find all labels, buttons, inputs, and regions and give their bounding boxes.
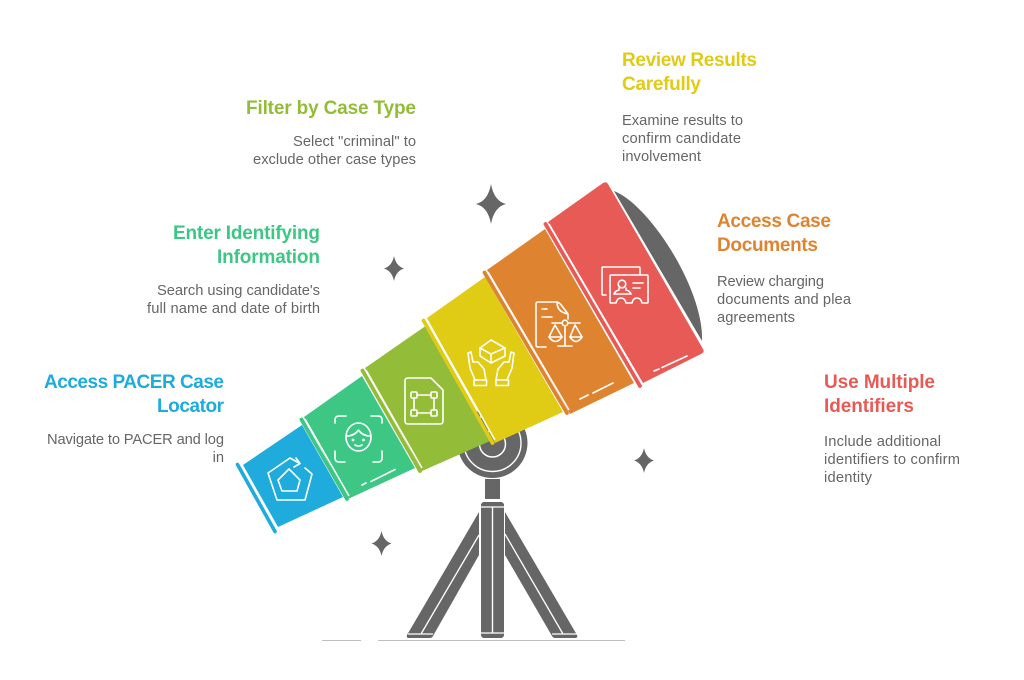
text block: Use Multiple Identifiers: Identifiers	[824, 396, 914, 417]
text block: Enter Identifying Information	[147, 223, 320, 317]
star: right	[634, 448, 654, 473]
text block: Access PACER Case Locator: in	[213, 450, 224, 466]
text block: Access PACER Case Locator	[44, 372, 225, 466]
text block: Use Multiple Identifiers: Include additional	[824, 434, 941, 450]
text block: Access PACER Case Locator: Access PACER Case	[44, 372, 224, 393]
text block: Use Multiple Identifiers: Use Multiple	[824, 372, 935, 393]
icon: pentagon with rotation arrow	[268, 458, 312, 500]
text block: Access Case Documents: Access Case	[717, 211, 831, 232]
text block: Access Case Documents	[717, 211, 852, 326]
text block: Access Case Documents: Documents	[717, 235, 818, 256]
icon: ID cards	[602, 267, 648, 303]
text block: Review Results Carefully: confirm candidate	[622, 131, 741, 147]
text block: Access PACER Case Locator: Navigate to PACER and log	[47, 432, 224, 448]
segment 6: red	[546, 182, 704, 386]
icon: hands holding a box	[468, 340, 514, 386]
text block: Review Results Carefully: Review Results	[622, 50, 757, 71]
text block: Access PACER Case Locator: Locator	[157, 396, 225, 417]
text block: Review Results Carefully: Carefully	[622, 74, 701, 95]
text block: Access Case Documents: Review charging	[717, 274, 824, 290]
star: top	[476, 184, 506, 224]
text block: Enter Identifying Information: full name and date of birth	[147, 301, 320, 317]
text block: Enter Identifying Information: Information	[217, 247, 320, 268]
segment 3: olive	[362, 325, 490, 471]
text block: Filter by Case Type: Filter by Case Type	[246, 98, 416, 119]
text block: Enter Identifying Information: Enter Identifying	[173, 223, 320, 244]
text block: Use Multiple Identifiers: identifiers to confirm	[824, 452, 960, 468]
tripod stand	[407, 408, 577, 638]
highlight dashes	[654, 356, 687, 371]
star: left	[384, 256, 404, 281]
segment 4: yellow	[424, 277, 563, 443]
icon: document with scales	[536, 302, 582, 347]
text block: Use Multiple Identifiers: identity	[824, 470, 873, 486]
ground line	[322, 640, 625, 642]
text block: Enter Identifying Information: Search using candidate's	[157, 283, 320, 299]
segment 5: orange	[484, 229, 634, 414]
highlight dashes	[362, 470, 395, 485]
text block: Use Multiple Identifiers	[824, 372, 960, 486]
text block: Review Results Carefully	[622, 50, 757, 165]
icon: document with bounding box	[405, 378, 443, 424]
segment 1: blue	[238, 425, 343, 532]
text block: Filter by Case Type	[246, 98, 416, 168]
star: lower left	[372, 531, 392, 556]
segment 2: green	[302, 376, 415, 499]
text block: Review Results Carefully: involvement	[622, 149, 701, 165]
telescope lens	[614, 191, 702, 341]
highlight dashes	[580, 383, 613, 399]
text block: Access Case Documents: agreements	[717, 310, 795, 326]
text block: Review Results Carefully: Examine results to	[622, 113, 743, 129]
text block: Access Case Documents: documents and plea	[717, 292, 852, 308]
text block: Filter by Case Type: Select "criminal" to	[293, 134, 416, 150]
text block: Filter by Case Type: exclude other case types	[253, 152, 416, 168]
icon: face scan	[335, 416, 382, 462]
